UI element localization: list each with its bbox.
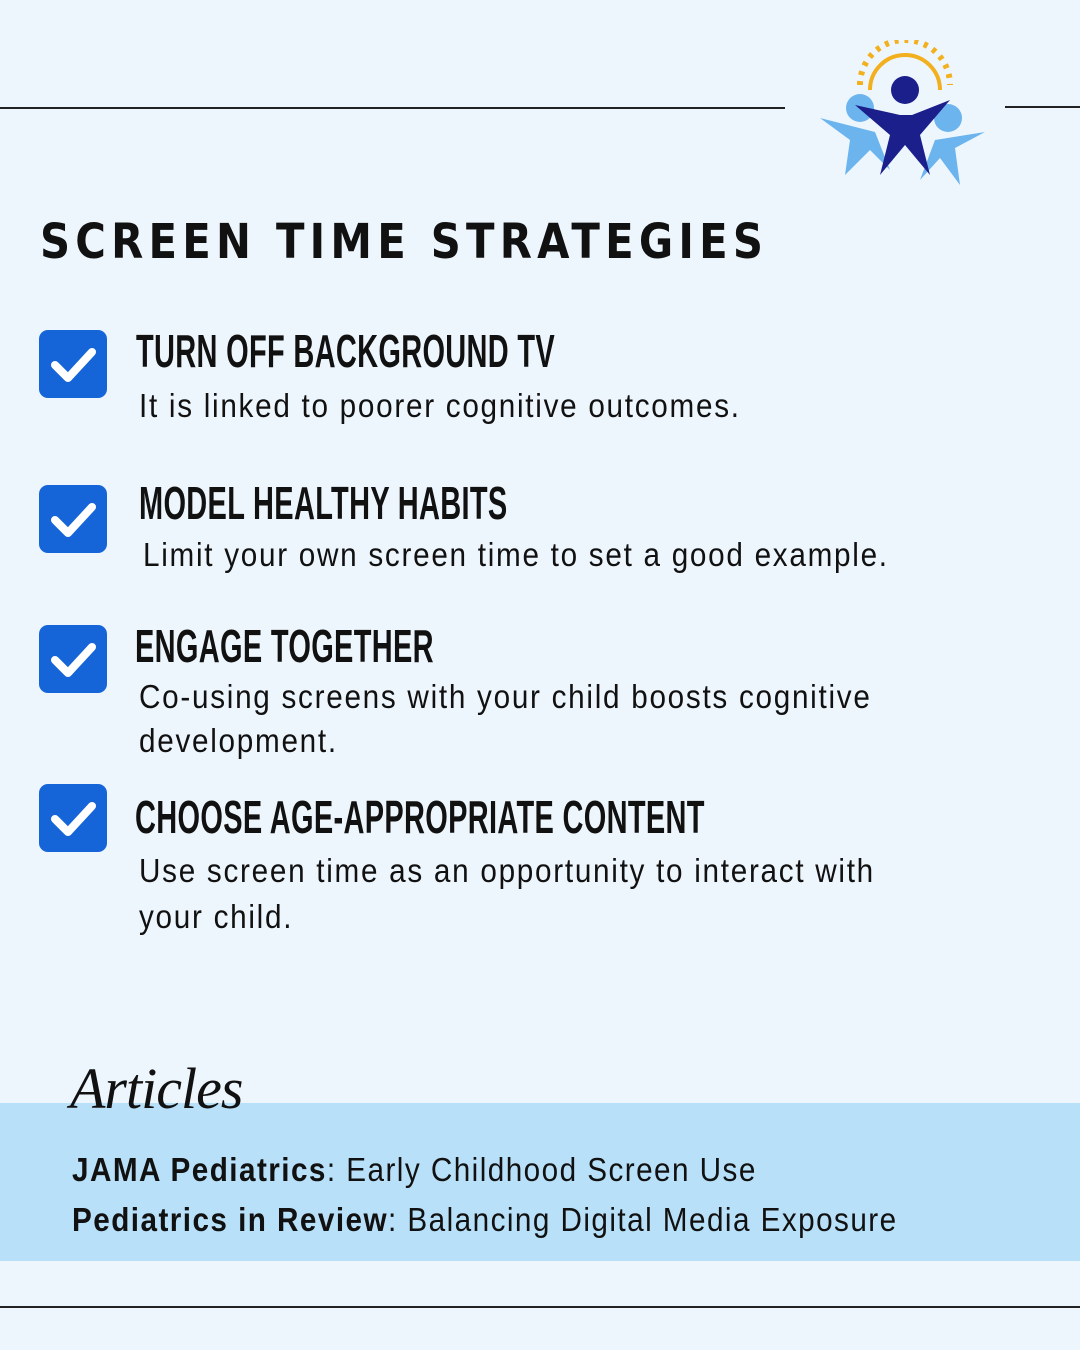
- item 3: Co-using screens with your child boosts cognitive: [139, 678, 872, 715]
- logo: [820, 40, 985, 185]
- item 2: Limit your own screen time to set a good example.: [143, 536, 889, 573]
- item 4: your child.: [139, 898, 293, 935]
- item 4: CHOOSE AGE-APPROPRIATE CONTENT: [135, 791, 705, 843]
- articles heading: Articles: [70, 1056, 242, 1121]
- item 1: [39, 325, 741, 424]
- item 2: MODEL HEALTHY HABITS: [139, 477, 508, 529]
- item 4: Use screen time as an opportunity to interact with: [139, 852, 875, 889]
- item 3: [39, 620, 872, 759]
- articles band: Pediatrics in Review: Balancing Digital Media Exposure: [72, 1201, 898, 1238]
- item 1: It is linked to poorer cognitive outcomes.: [139, 387, 741, 424]
- item 2: [39, 477, 889, 573]
- articles band: [0, 1103, 1080, 1261]
- item 4: [39, 784, 875, 935]
- title: SCREEN TIME STRATEGIES: [40, 214, 768, 270]
- item 3: ENGAGE TOGETHER: [135, 620, 434, 672]
- item 3: development.: [139, 722, 338, 759]
- articles band: JAMA Pediatrics: Early Childhood Screen Use: [72, 1151, 757, 1188]
- item 1: TURN OFF BACKGROUND TV: [136, 325, 555, 377]
